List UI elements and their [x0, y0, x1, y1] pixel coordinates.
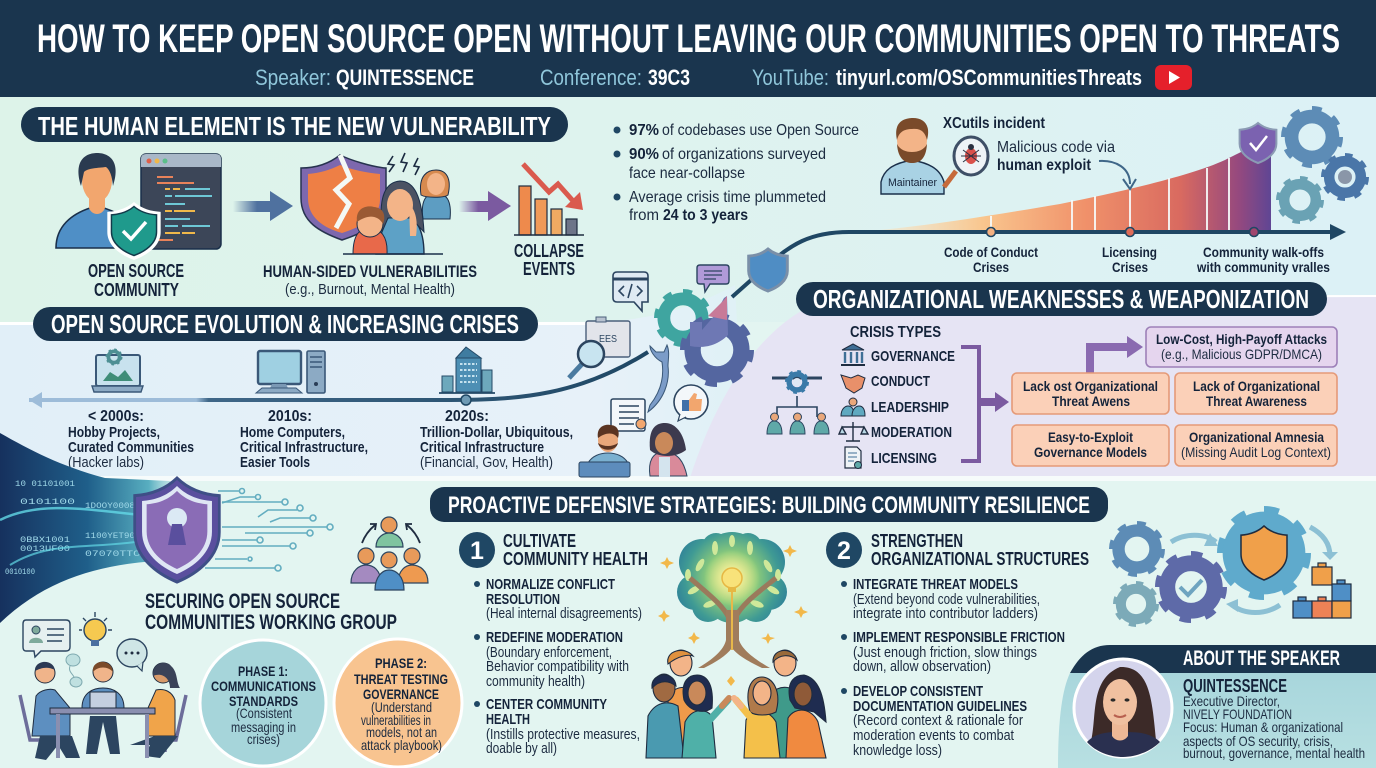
- illustration: team meeting: [20, 612, 186, 760]
- icon: handshake: [841, 375, 865, 393]
- box: low-cost attacks: (e.g., Malicious GDPR/DMCA): [1161, 346, 1322, 362]
- raised hands: [706, 698, 756, 724]
- box: threat awareness: Threat Awareness: [1206, 393, 1307, 409]
- icon: maintainer bust: Maintainer: [888, 177, 937, 189]
- phase 2 circle: attack playbook): [361, 737, 442, 753]
- item: redefine moderation: community health): [486, 673, 585, 690]
- speaker bio: Executive Director,: [1183, 693, 1280, 709]
- timeline: before 2000s: Curated Communities: [68, 439, 194, 456]
- box: organizational amnesia: (Missing Audit Log Context): [1181, 444, 1331, 460]
- timeline: 2020s: 2020s:: [445, 408, 489, 425]
- box: threat awens: Lack ost Organizational: [1023, 378, 1158, 394]
- speaker bio: QUINTESSENCE: [1183, 676, 1287, 696]
- digital data band: 1DOOY0008: [85, 502, 135, 511]
- icon: collapse bar chart: [514, 164, 584, 235]
- box: governance models: Governance Models: [1034, 444, 1147, 460]
- icon: licence document: [845, 447, 862, 468]
- label: collapse events: [514, 241, 584, 279]
- label: collapse events: EVENTS: [523, 259, 575, 279]
- chart milestones: Crises: [973, 259, 1009, 275]
- icon: checklist document: [611, 399, 646, 431]
- lightbulb: [79, 612, 112, 646]
- crisis types list: LEADERSHIP: [871, 399, 949, 416]
- label: open source community: OPEN SOURCE: [88, 261, 184, 281]
- box: organizational amnesia: [1175, 425, 1337, 466]
- speaker bio: aspects of OS security, crisis,: [1183, 733, 1333, 749]
- icon: blue gear: [685, 318, 749, 382]
- chairs: [20, 695, 186, 752]
- phase 1 circle: STANDARDS: [229, 693, 298, 709]
- speaker line: Conference:: [540, 65, 642, 90]
- icon: code window bubble: [613, 272, 648, 311]
- speaker bio: Focus: Human & organizational: [1183, 719, 1343, 735]
- item: implement responsible friction: down, allow observation): [853, 658, 991, 675]
- box: low-cost attacks: [1146, 327, 1337, 367]
- chart milestones: Crises: [1112, 259, 1148, 275]
- timeline: before 2000s: Hobby Projects,: [68, 424, 160, 441]
- timeline: 2010s: Home Computers,: [240, 424, 345, 441]
- speaker line: tinyurl.com/OSCommunitiesThreats: [836, 65, 1142, 90]
- speaker line: Speaker:: [255, 65, 331, 90]
- arrow: vulnerabilities to collapse: [459, 191, 511, 221]
- panel: about the speaker: [1058, 645, 1376, 768]
- icon: city skyline: [439, 347, 495, 405]
- item: center community health: doable by all): [486, 740, 557, 757]
- digital data band: 10 01101001: [15, 480, 75, 489]
- item: integrate threat models: [841, 576, 1040, 622]
- heading: working group: COMMUNITIES WORKING GROUP: [145, 611, 397, 634]
- header banner: [0, 0, 1376, 97]
- digital data band: 0013UF00: [20, 545, 70, 554]
- heading: the human element: [21, 107, 568, 142]
- seated left: [32, 662, 80, 760]
- digital data band: 0BBX1001: [20, 536, 70, 545]
- box: threat awareness: [1175, 373, 1337, 414]
- chart milestones: Licensing: [1102, 244, 1157, 260]
- icon: leadership group: [841, 398, 865, 416]
- phase 1 circle: COMMUNICATIONS: [211, 678, 316, 694]
- statistics bullets: of organizations surveyed: [662, 146, 826, 163]
- speaker bio: [1183, 676, 1365, 761]
- portrait: [1074, 659, 1172, 757]
- item: center community health: (Instills protective measures,: [486, 726, 640, 743]
- tree trunk and roots: [690, 578, 776, 668]
- item: redefine moderation: (Boundary enforcement,: [486, 644, 612, 661]
- icon: gears with shield and blocks: [1113, 513, 1351, 624]
- icon: purple flag fragment: [690, 296, 728, 347]
- maintainer and xcutils incident: Malicious code via: [997, 139, 1115, 156]
- item: documentation guidelines: DOCUMENTATION GUIDELINES: [853, 698, 1027, 715]
- bracket arrow to weakness boxes: [961, 347, 1009, 461]
- lightbulb: [722, 568, 742, 592]
- icon: open source community person with code window and shield: [56, 153, 221, 260]
- building blocks: [1293, 563, 1351, 618]
- box: threat awareness: Lack of Organizational: [1193, 378, 1320, 394]
- number badge 2: 2: [837, 537, 851, 565]
- statistics bullets: face near-collapse: [629, 165, 745, 182]
- heading: the human element: THE HUMAN ELEMENT IS THE NEW VULNERABILITY: [38, 111, 551, 141]
- item: documentation guidelines: moderation events to combat: [853, 727, 1015, 744]
- icon: youtube play button: [1155, 65, 1192, 90]
- statistics bullets: Average crisis time plummeted: [629, 189, 826, 206]
- strategy 2: strengthen organizational structures: [826, 531, 1089, 759]
- arrow: exploit to chart: [1099, 161, 1136, 189]
- idea bubble: [23, 620, 70, 657]
- icon: blue shield: [749, 249, 787, 291]
- chart milestones: [944, 228, 1330, 275]
- speaker line: 39C3: [648, 65, 690, 90]
- box: organizational amnesia: Organizational Amnesia: [1189, 429, 1324, 445]
- crisis types list: LICENSING: [871, 450, 937, 467]
- icon: wrench: [648, 345, 669, 412]
- item: center community health: [474, 696, 640, 757]
- strategy 1: cultivate community health: CULTIVATE: [503, 531, 576, 551]
- statistics bullets: from: [629, 207, 659, 224]
- crisis types list: [839, 324, 955, 468]
- icon: broken shield with stressed people: [301, 153, 450, 254]
- chart milestones: Community walk-offs: [1203, 244, 1324, 260]
- maintainer and xcutils incident: XCutils incident: [943, 115, 1046, 132]
- icon: document with magnifier: EES: [599, 334, 617, 345]
- digital data band: 1100YET90: [85, 532, 135, 541]
- central collaboration illustration: [569, 249, 787, 477]
- crisis types list: CONDUCT: [871, 373, 930, 390]
- crisis types list: CRISIS TYPES: [850, 324, 941, 341]
- phase 2 circle: PHASE 2:: [375, 655, 427, 671]
- timeline: before 2000s: < 2000s:: [88, 408, 144, 425]
- growth line with arrow: [29, 224, 1346, 408]
- timeline: 2020s: [420, 408, 573, 471]
- phase 1 circle: PHASE 1:: [238, 663, 288, 679]
- item: redefine moderation: REDEFINE MODERATION: [486, 629, 623, 646]
- timeline: 2010s: Critical Infrastructure,: [240, 439, 368, 456]
- item: normalize conflict: [474, 576, 642, 622]
- item: implement responsible friction: [841, 629, 1065, 675]
- icon: two contributors: [579, 423, 687, 477]
- timeline: 2020s: Trillion-Dollar, Ubiquitous,: [420, 424, 573, 441]
- phase 2 circle: GOVERNANCE: [363, 686, 439, 702]
- statistics bullets: [614, 122, 859, 224]
- icon: magnifier with bug: [944, 137, 988, 187]
- phase 2 circle: models, not an: [366, 724, 437, 740]
- number badge 1: 1: [470, 537, 484, 565]
- speaker line: [255, 65, 1142, 90]
- item: redefine moderation: Behavior compatibility with: [486, 658, 629, 675]
- item: center community health: CENTER COMMUNITY: [486, 696, 607, 713]
- icon: purple shield on chart: [1240, 123, 1276, 163]
- item: documentation guidelines: DEVELOP CONSISTENT: [853, 683, 983, 700]
- statistics bullets: 24 to 3 years: [663, 207, 748, 224]
- speaker bio: NIVELY FOUNDATION: [1183, 706, 1292, 722]
- digital data band: 0101100: [20, 498, 75, 507]
- label: open source community: [88, 261, 184, 300]
- chat bubble: [117, 639, 147, 671]
- box: threat awens: [1012, 373, 1169, 414]
- speaker line: QUINTESSENCE: [336, 65, 474, 90]
- item: redefine moderation: [474, 629, 629, 690]
- icon: keyhole shield: [135, 478, 219, 582]
- icon: scales: [839, 422, 868, 441]
- icon: thumbs up bubble: [674, 385, 708, 421]
- heading: open source evolution: [33, 307, 538, 341]
- strategy 2: strengthen organizational structures: ORGANIZATIONAL STRUCTURES: [871, 549, 1089, 569]
- icon: desktop computer: [256, 351, 325, 393]
- phase 1 circle: (Consistent: [236, 705, 292, 721]
- illustration: community tree: [646, 532, 826, 758]
- timeline: 2010s: 2010s:: [268, 408, 312, 425]
- statistics bullets: 90%: [629, 146, 659, 163]
- timeline: 2020s: (Financial, Gov, Health): [420, 454, 553, 471]
- statistics bullets: of codebases use Open Source: [662, 122, 859, 139]
- maintainer and xcutils incident: human exploit: [997, 157, 1092, 174]
- thought smoke: [66, 654, 82, 687]
- box: low-cost attacks: Low-Cost, High-Payoff Attacks: [1156, 331, 1327, 347]
- item: documentation guidelines: (Record context & rationale for: [853, 712, 1023, 729]
- icon: governance building: [841, 344, 865, 365]
- item: implement responsible friction: (Just enough friction, slow things: [853, 644, 1037, 661]
- item: normalize conflict: NORMALIZE CONFLICT: [486, 576, 615, 593]
- label: human-sided vulnerabilities: (e.g., Burnout, Mental Health): [285, 281, 455, 298]
- arrow up to attacks box: [1090, 336, 1143, 373]
- seated centre with laptop: [82, 662, 124, 754]
- item: normalize conflict: RESOLUTION: [486, 591, 560, 608]
- phase 2 circle: [334, 639, 462, 767]
- phase 1 circle: messaging in: [231, 719, 296, 735]
- group of people: [646, 650, 826, 758]
- digital data band: 07070TTC: [85, 550, 140, 559]
- digital data band: [0, 433, 175, 623]
- label: open source community: COMMUNITY: [94, 280, 179, 300]
- arrow: community to vulnerabilities: [233, 191, 293, 221]
- item: integrate threat models: (Extend beyond code vulnerabilities,: [853, 591, 1040, 608]
- strategy 1: cultivate community health: COMMUNITY HEALTH: [503, 549, 648, 569]
- heading: working group: [145, 590, 397, 634]
- statistics bullets: 97%: [629, 122, 659, 139]
- item: center community health: HEALTH: [486, 711, 530, 728]
- maintainer and xcutils incident: [881, 115, 1136, 194]
- heading: working group: SECURING OPEN SOURCE: [145, 590, 340, 613]
- strategy 1: cultivate community health: [459, 531, 648, 757]
- item: documentation guidelines: [841, 683, 1027, 759]
- box: governance models: Easy-to-Exploit: [1048, 429, 1133, 445]
- item: documentation guidelines: knowledge loss): [853, 742, 942, 759]
- rising crisis area chart: [859, 140, 1271, 232]
- sparkles: [658, 545, 808, 686]
- number badge 1: [459, 532, 495, 568]
- chart milestones: Code of Conduct: [944, 244, 1038, 260]
- label: human-sided vulnerabilities: [263, 262, 477, 298]
- strategy 2: strengthen organizational structures: STRENGTHEN: [871, 531, 963, 551]
- heading: proactive defensive strategies: PROACTIVE DEFENSIVE STRATEGIES: BUILDING COMMUNITY RESILIENCE: [448, 492, 1090, 519]
- crisis types list: MODERATION: [871, 424, 952, 441]
- icon: org chart with gear: [767, 372, 829, 434]
- item: normalize conflict: (Heal internal disagreements): [486, 605, 642, 622]
- timeline: 2020s: Critical Infrastructure: [420, 439, 544, 456]
- icon: speech bubble: [697, 265, 729, 292]
- timeline: before 2000s: (Hacker labs): [68, 454, 144, 471]
- heading: open source evolution: OPEN SOURCE EVOLUTION & INCREASING CRISES: [51, 309, 519, 339]
- chart milestones: with community vralles: [1196, 259, 1330, 275]
- phase 2 circle: vulnerabilities in: [361, 712, 431, 728]
- icon: document with magnifier: [569, 317, 630, 378]
- phase 1 circle: crises): [247, 731, 280, 747]
- icon: community rotation group: [351, 517, 428, 590]
- item: implement responsible friction: IMPLEMENT RESPONSIBLE FRICTION: [853, 629, 1065, 646]
- timeline: 2010s: Easier Tools: [240, 454, 310, 471]
- timeline: before 2000s: [68, 408, 194, 471]
- seated right: [130, 663, 180, 758]
- phase 2 circle: THREAT TESTING: [354, 671, 448, 687]
- number badge 2: [826, 532, 862, 568]
- item: integrate threat models: INTEGRATE THREAT MODELS: [853, 576, 1018, 593]
- icon: laptop with gear: [92, 350, 143, 392]
- speaker line: YouTube:: [752, 65, 829, 90]
- box: threat awens: Threat Awens: [1052, 393, 1130, 409]
- phase 1 circle: [200, 640, 326, 766]
- item: integrate threat models: integrate into contributor ladders): [853, 605, 1038, 622]
- label: collapse events: COLLAPSE: [514, 241, 584, 261]
- digital data band: 0010100: [5, 568, 35, 577]
- icon: teal gear: [658, 293, 708, 343]
- box: governance models: [1012, 425, 1169, 466]
- heading: proactive defensive strategies: [430, 487, 1108, 522]
- tree crown: [677, 532, 787, 623]
- label: human-sided vulnerabilities: HUMAN-SIDED VULNERABILITIES: [263, 262, 477, 281]
- circuit traces: [205, 488, 333, 571]
- table: [50, 708, 155, 758]
- phase 2 circle: (Understand: [371, 699, 432, 715]
- timeline: 2010s: [240, 408, 368, 471]
- icon: chart gears: [1279, 110, 1366, 221]
- icon: maintainer bust: [881, 118, 944, 194]
- crisis types list: GOVERNANCE: [871, 348, 955, 365]
